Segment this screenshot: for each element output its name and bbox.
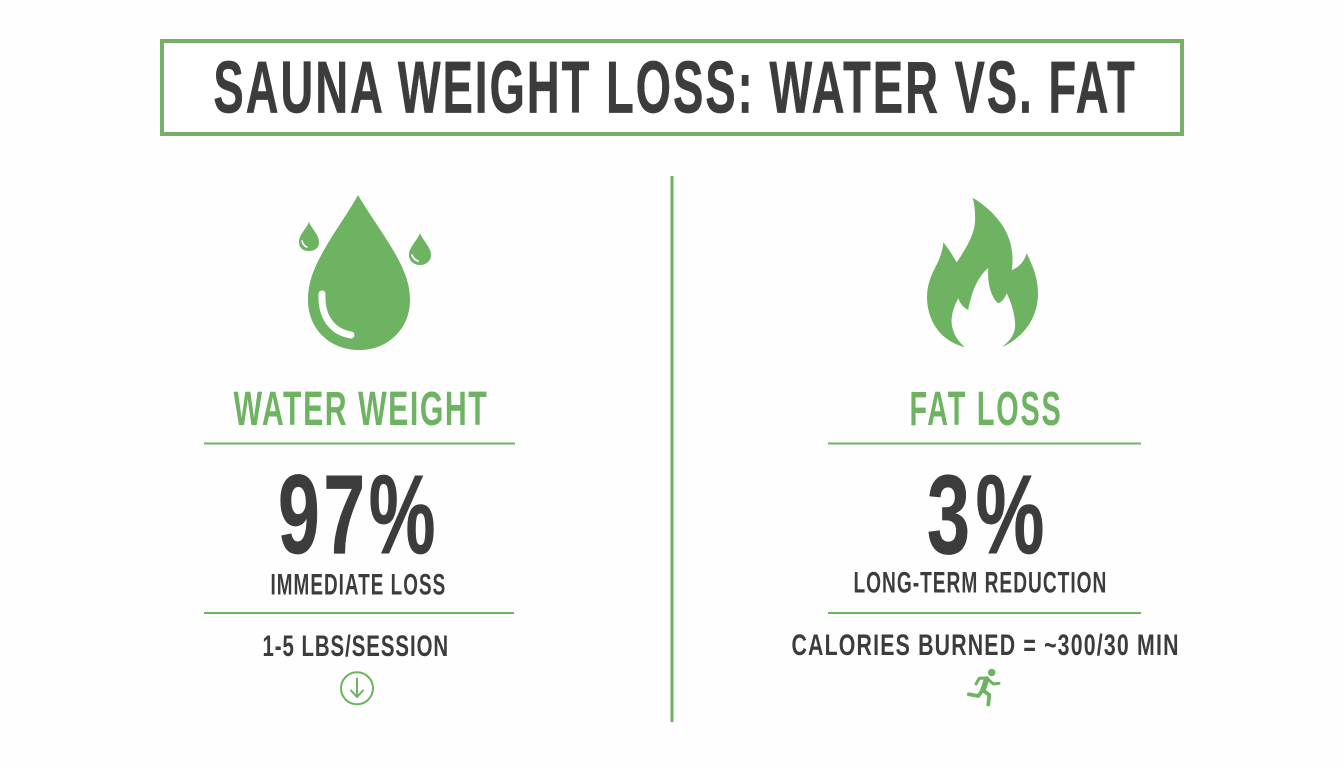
heading: fat loss: FAT LOSS <box>910 383 1061 436</box>
icon: flame <box>927 198 1038 347</box>
text: calories burned: CALORIES BURNED = ~300/30 MIN <box>792 627 1178 662</box>
text: lbs per session: 1-5 LBS/SESSION <box>262 630 448 663</box>
stat: 3%: 3% <box>927 453 1044 577</box>
icon: water drops <box>299 195 431 350</box>
panel: fat loss <box>792 198 1178 704</box>
label: immediate loss: IMMEDIATE LOSS <box>270 569 445 602</box>
title: SAUNA WEIGHT LOSS: WATER VS. FAT <box>214 46 1135 128</box>
icon: down arrow in circle <box>341 672 373 704</box>
panel: water weight <box>204 195 515 704</box>
label: long-term reduction: LONG-TERM REDUCTION <box>854 566 1106 600</box>
stat: 97%: 97% <box>278 453 435 578</box>
heading: water weight: WATER WEIGHT <box>234 383 487 436</box>
icon: runner <box>969 669 999 704</box>
